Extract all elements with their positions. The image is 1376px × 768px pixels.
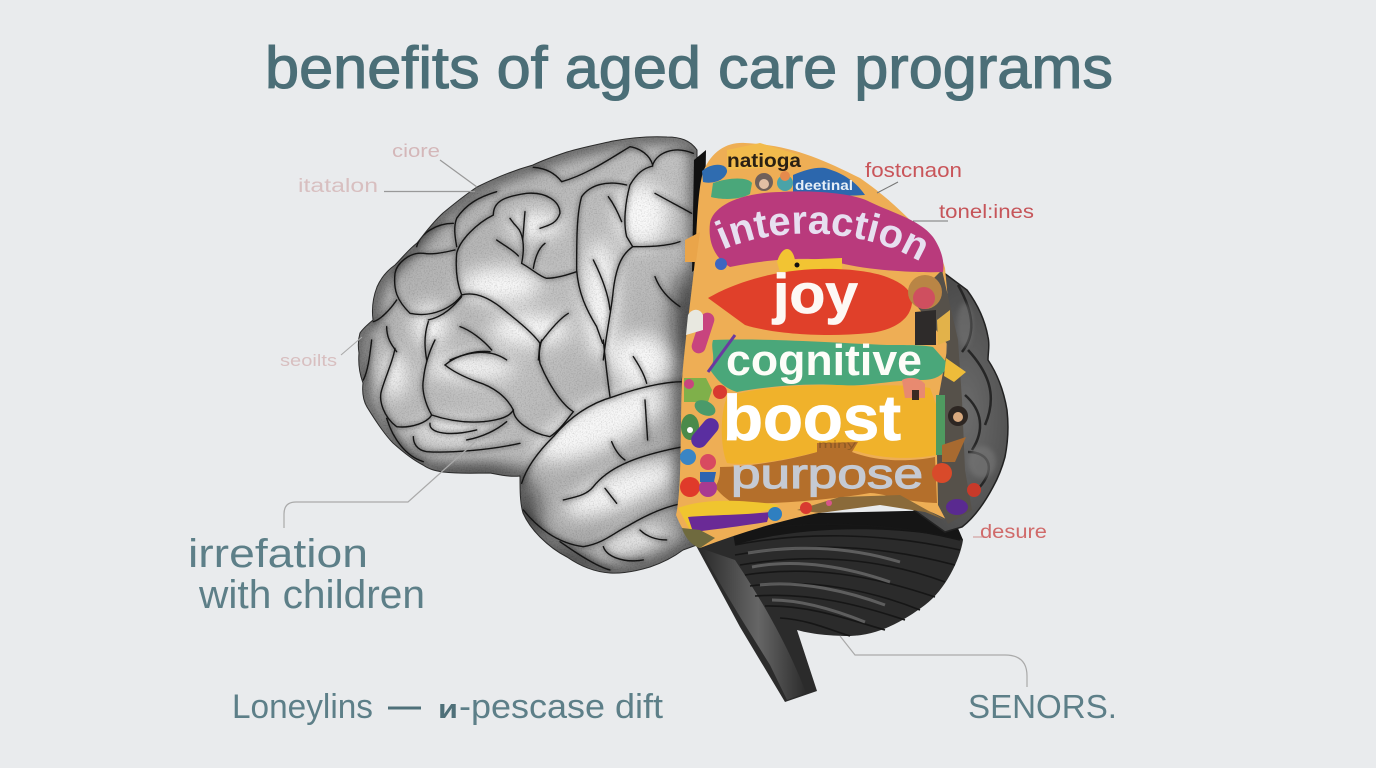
creases [363,147,693,570]
footer text: left: ᴎ [438,694,458,724]
infographic canvas [191,44,1114,725]
collage strip on right edge [912,270,972,524]
callout: irrefation with children: irrefation [188,532,368,576]
footer text: left [232,688,664,726]
callout: tonel:ines [913,202,1034,223]
callout: tonel:ines: tonel:ines [939,202,1034,223]
highlights [355,130,700,580]
bottom collage strips [678,495,968,548]
callout: senors: SENORS. [968,688,1117,725]
yellow accent [777,249,842,272]
label: national: natioga [727,151,801,172]
right collage figures [902,275,981,497]
title: benefits of aged care programs [265,35,1113,101]
illustration: brain [358,136,1026,702]
callout: fostcnaon [865,160,962,193]
callout: ciore: ciore [392,141,440,161]
band: cognitive: cognitive [726,336,922,385]
band: purpose [715,440,937,503]
rim shading [358,137,697,573]
callout: ciore [392,141,477,187]
footer text: left: -pescase dift [459,688,664,726]
band: boost: boost [723,382,901,454]
gap behind coloured lobe [692,150,706,272]
callout: seoilts: seoilts [280,351,337,370]
band: joy [708,262,912,335]
crease shading [363,147,693,570]
band: interaction: interaction [714,212,926,260]
stipple texture [355,130,700,580]
coloured lobe [676,142,981,548]
band: purpose: miny [818,440,856,451]
right lobe, dark grey [900,270,1008,532]
left hemisphere, greyscale [355,130,700,580]
blue blob with label: deetinal [795,177,853,193]
callout: desure: desure [980,522,1047,543]
band: joy: joy [772,262,858,325]
left collage stickers [680,232,735,497]
blue blob with label [793,168,865,196]
band: purpose: purpose [731,450,923,497]
callout: irrefation with children: with children [198,573,425,617]
top collage patches [702,143,800,199]
orange collage base [676,143,948,548]
callout: itatalon: itatalon [298,176,378,197]
callout: irrefation with children [188,442,475,617]
cerebellum and brain stem [693,510,963,702]
callout: fostcnaon: fostcnaon [865,160,962,182]
footer text: left: Loneylins [232,688,373,726]
callout: senors [840,636,1117,725]
callout: seoilts [280,337,362,370]
